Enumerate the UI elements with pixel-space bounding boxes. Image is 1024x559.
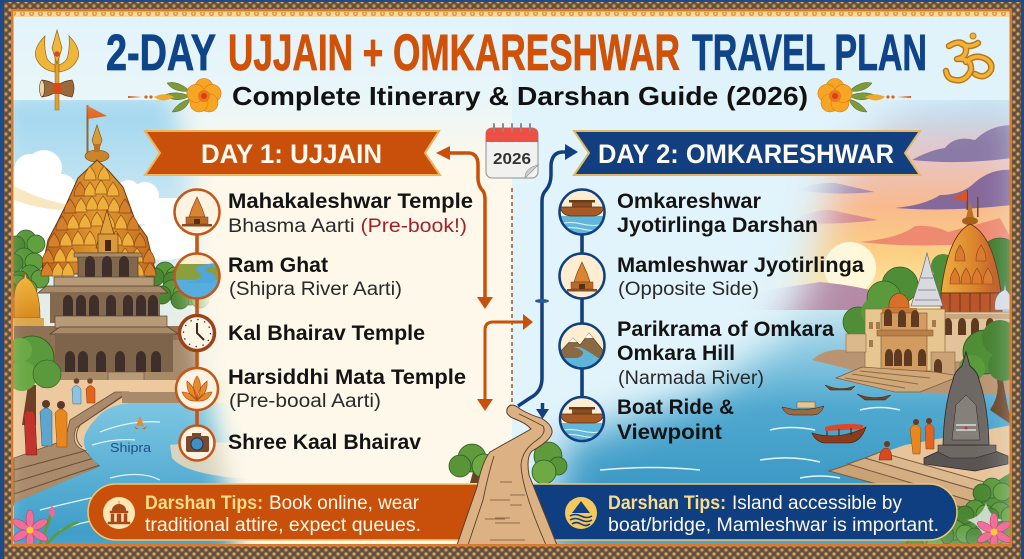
stop: Boat Ride and Viewpoint: Viewpoint <box>617 421 722 444</box>
title: UJJAIN + OMKARESHWAR <box>228 24 680 81</box>
stop: Parikrama of Omkara: (Narmada River) <box>618 368 764 389</box>
tree right <box>959 320 1010 424</box>
icon: temple dome <box>103 497 135 529</box>
icon: calendar 2026 <box>486 124 538 178</box>
trees behind temple <box>0 230 209 309</box>
icon: lotus bottom left <box>11 506 78 550</box>
stop: Parikrama of Omkara: Parikrama of Omkara <box>617 318 834 341</box>
upper pavilion <box>78 253 138 278</box>
stop: Mahakaleshwar Temple: Mahakaleshwar Temple <box>228 190 473 213</box>
stop: Mamleshwar Jyotirlinga <box>560 254 864 300</box>
stop: Kal Bhairav Temple: Kal Bhairav Temple <box>228 322 425 345</box>
land <box>812 350 1010 395</box>
pilgrims near temple <box>72 378 95 404</box>
tips text: Day 2: Island accessible by <box>732 493 902 514</box>
title: 2-DAY <box>106 24 216 81</box>
stop: Ram Ghat: Ram Ghat <box>228 254 328 277</box>
ghat steps right <box>836 367 960 392</box>
illustration: Omkareshwar temples and Narmada river <box>512 100 1024 556</box>
river <box>14 403 254 544</box>
subtitle: Complete Itinerary & Darshan Guide (2026) <box>232 81 808 111</box>
banner: Day 1: DAY 1: UJJAIN <box>201 139 382 169</box>
tips text: Day 2: Darshan Tips: <box>608 493 726 514</box>
timeline: Day 1 <box>170 190 473 460</box>
banner: Day 1 <box>145 131 440 175</box>
icon: flower left <box>128 78 223 115</box>
stop: Shree Kaal Bhairav <box>180 426 421 460</box>
water ripples <box>600 406 900 479</box>
icon: lotus bottom right <box>967 503 1012 551</box>
stop: Boat Ride and Viewpoint <box>558 396 734 444</box>
sun <box>824 242 876 294</box>
banner: Day 2 <box>574 131 920 175</box>
banner: Day 2: DAY 2: OMKARESHWAR <box>598 139 894 169</box>
stop: Omkareshwar Jyotirlinga Darshan <box>558 190 818 237</box>
tips text: Day 1: traditional attire, expect queues. <box>145 515 421 536</box>
icon: calendar 2026: 2026 <box>493 151 531 168</box>
stop: Harsiddhi Mata Temple: Harsiddhi Mata Temple <box>228 366 466 389</box>
tips panel: Day 1 <box>88 484 490 540</box>
tree: left of road <box>449 444 496 483</box>
tips panel: Day 2 <box>530 484 957 540</box>
tree: right of road <box>532 442 567 484</box>
river lamp <box>134 416 147 429</box>
tips text: Day 2: boat/bridge, Mamleshwar is important. <box>608 515 939 536</box>
pilgrims right <box>879 418 934 460</box>
ground <box>14 380 225 458</box>
dome small <box>14 272 40 318</box>
timeline: Day 2 <box>558 190 864 444</box>
stop: Mamleshwar Jyotirlinga: (Opposite Side) <box>618 279 759 300</box>
tree foreground <box>14 336 62 425</box>
trees behind palace <box>843 238 1020 337</box>
main temple right <box>941 190 1002 313</box>
white temple <box>911 253 943 306</box>
pilgrims near river <box>24 400 67 455</box>
stop: Shree Kaal Bhairav: Shree Kaal Bhairav <box>228 431 421 454</box>
bushes bottom right <box>898 474 1010 544</box>
icon: om symbol <box>946 33 991 80</box>
blue route arrows <box>518 144 578 419</box>
stop: Parikrama of Omkara: Omkara Hill <box>617 342 735 365</box>
mountains <box>764 282 869 310</box>
boats <box>782 385 891 443</box>
stop: Mahakaleshwar Temple: Bhasma Aarti (Pre-book!) <box>228 216 467 237</box>
stop: Omkareshwar Jyotirlinga Darshan: Omkareshwar <box>617 190 761 213</box>
illustration: Mahakaleshwar temple and Shipra river <box>14 100 254 544</box>
sunset clouds <box>790 125 1012 246</box>
stone shrine <box>924 352 1008 471</box>
icon: trishul and damru <box>35 30 79 110</box>
stop: Boat Ride and Viewpoint: Boat Ride & <box>617 396 734 419</box>
icon: mountain and water <box>565 497 597 529</box>
curved ghat steps <box>14 392 128 505</box>
orange route arrows <box>436 146 533 411</box>
stop: Ram Ghat <box>170 254 402 302</box>
small white dome <box>995 282 1012 310</box>
label: Shipra: Shipra <box>110 440 152 455</box>
stop: Harsiddhi Mata Temple: (Pre-booal Aarti) <box>229 391 381 412</box>
stop: Mahakaleshwar Temple <box>174 190 473 237</box>
tips text: Day 1: Book online, wear <box>269 493 420 514</box>
stop: Parikrama of Omkara <box>558 318 834 389</box>
stop: Ram Ghat: (Shipra River Aarti) <box>229 279 402 300</box>
ghat foreground <box>890 426 1010 482</box>
clouds left <box>6 150 197 263</box>
icon: flower right <box>816 78 911 115</box>
stop: Harsiddhi Mata Temple <box>176 366 466 412</box>
upper tier <box>54 277 154 287</box>
palace buildings <box>846 293 1012 378</box>
winding road <box>457 405 557 545</box>
stop: Mamleshwar Jyotirlinga: Mamleshwar Jyotirlinga <box>617 254 864 277</box>
stop: Omkareshwar Jyotirlinga Darshan: Jyotirlinga Darshan <box>617 214 818 237</box>
stop: Kal Bhairav Temple <box>180 316 425 350</box>
tips text: Day 1: Darshan Tips: <box>145 493 263 514</box>
temple left <box>14 105 198 386</box>
center divider <box>511 188 513 415</box>
